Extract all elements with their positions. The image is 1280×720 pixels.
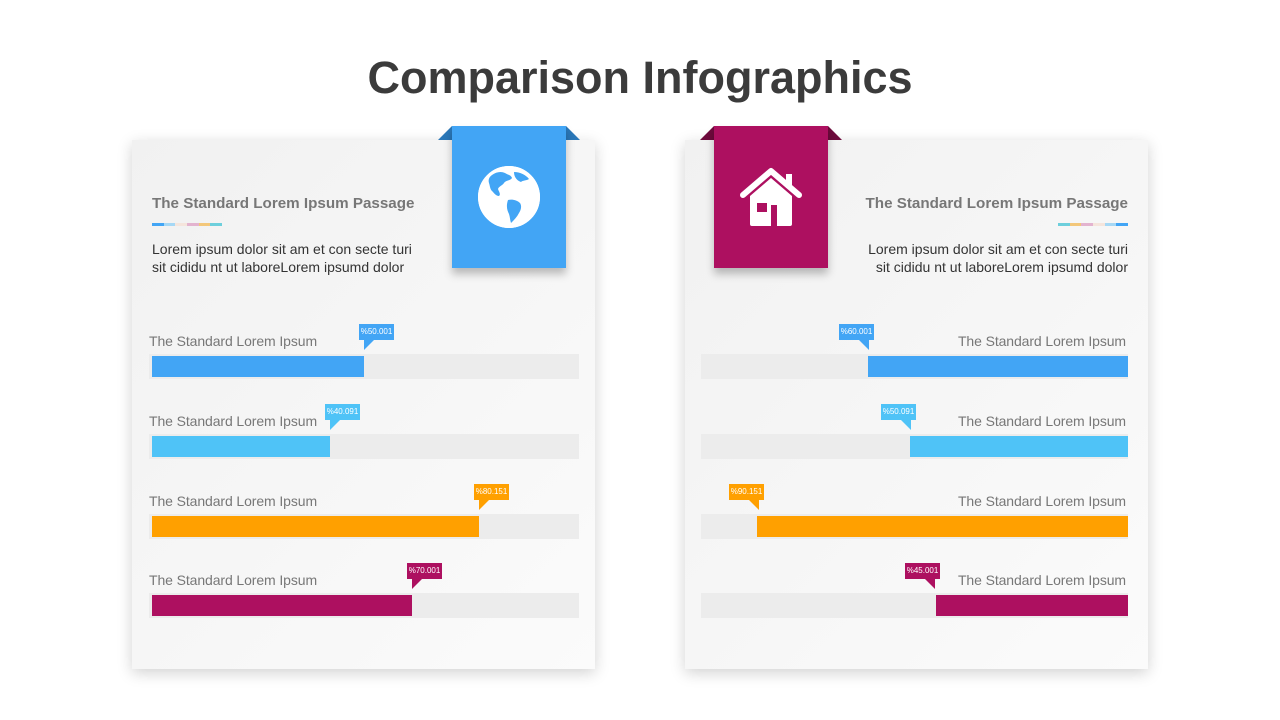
bar row 4: The Standard Lorem Ipsum bbox=[958, 572, 1126, 588]
text block left bbox=[152, 241, 412, 275]
bar row 1: The Standard Lorem Ipsum bbox=[958, 333, 1126, 349]
text block right: Lorem ipsum dolor sit am et con secte turi bbox=[868, 241, 1128, 257]
chart: left bars: %70.001 bbox=[409, 566, 440, 575]
text block right bbox=[868, 241, 1128, 275]
bar row 4: The Standard Lorem Ipsum bbox=[149, 572, 317, 588]
text block left: sit cididu nt ut laboreLorem ipsumd dolor bbox=[152, 259, 404, 275]
chart: left bars: %50.001 bbox=[361, 327, 392, 336]
icon: globe bbox=[478, 166, 540, 228]
ribbon: globe bbox=[438, 126, 580, 278]
bar row 3: The Standard Lorem Ipsum bbox=[149, 493, 317, 509]
heading left: The Standard Lorem Ipsum Passage bbox=[152, 195, 414, 212]
bar row 2: The Standard Lorem Ipsum bbox=[149, 413, 317, 429]
chart: right bars: %45.001 bbox=[907, 566, 938, 575]
chart: left bars: %40.091 bbox=[327, 407, 358, 416]
chart: left bars bbox=[149, 324, 579, 618]
bar row 2: The Standard Lorem Ipsum bbox=[958, 413, 1126, 429]
color dash left bbox=[152, 223, 222, 226]
chart: right bars: %50.091 bbox=[883, 407, 914, 416]
bar row 1: The Standard Lorem Ipsum bbox=[149, 333, 317, 349]
chart: right bars bbox=[701, 324, 1128, 618]
text block right: sit cididu nt ut laboreLorem ipsumd dolor bbox=[876, 259, 1128, 275]
chart: right bars: %60.001 bbox=[841, 327, 872, 336]
color dash right bbox=[1058, 223, 1128, 226]
chart: right bars: %90.151 bbox=[731, 487, 762, 496]
panel: right card bbox=[685, 140, 1148, 669]
heading right: The Standard Lorem Ipsum Passage bbox=[866, 195, 1128, 212]
panel: left card bbox=[132, 140, 595, 669]
title: Comparison Infographics bbox=[367, 52, 913, 103]
chart: left bars: %80.151 bbox=[476, 487, 507, 496]
icon: house bbox=[740, 168, 802, 226]
ribbon: house bbox=[700, 126, 842, 278]
text block left: Lorem ipsum dolor sit am et con secte turi bbox=[152, 241, 412, 257]
bar row 3: The Standard Lorem Ipsum bbox=[958, 493, 1126, 509]
